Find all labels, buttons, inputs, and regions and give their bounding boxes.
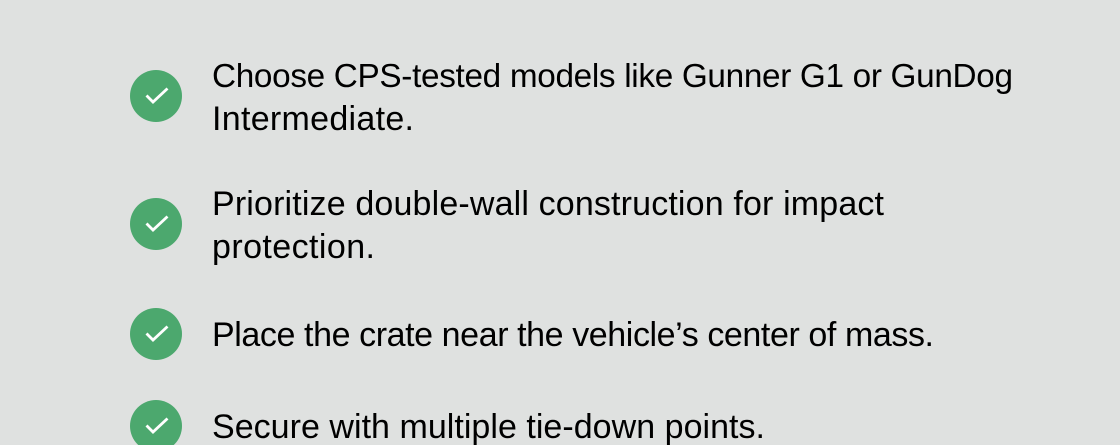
text: item 1 (212, 58, 1013, 138)
icon: green check 3 (130, 308, 182, 360)
item 2: double wall (130, 185, 885, 266)
text: item 1: Choose CPS-tested models like Gunner G1 or GunDog (212, 58, 1013, 95)
item 1: choose models (130, 58, 1013, 138)
text: item 3: Place the crate near the vehicle’s center of mass. (212, 316, 934, 354)
icon: green check 4 (130, 400, 182, 445)
item 4: tie-down (130, 400, 765, 445)
item 3: center of mass (130, 308, 934, 360)
icon: green check 1 (130, 70, 182, 122)
text: item 1: Intermediate. (212, 100, 414, 138)
text: item 2: protection. (212, 228, 375, 266)
text: item 2 (212, 185, 885, 266)
text: item 2: Prioritize double-wall construction for impact (212, 185, 885, 223)
icon: green check 2 (130, 198, 182, 250)
text: item 4: Secure with multiple tie-down points. (212, 408, 765, 445)
